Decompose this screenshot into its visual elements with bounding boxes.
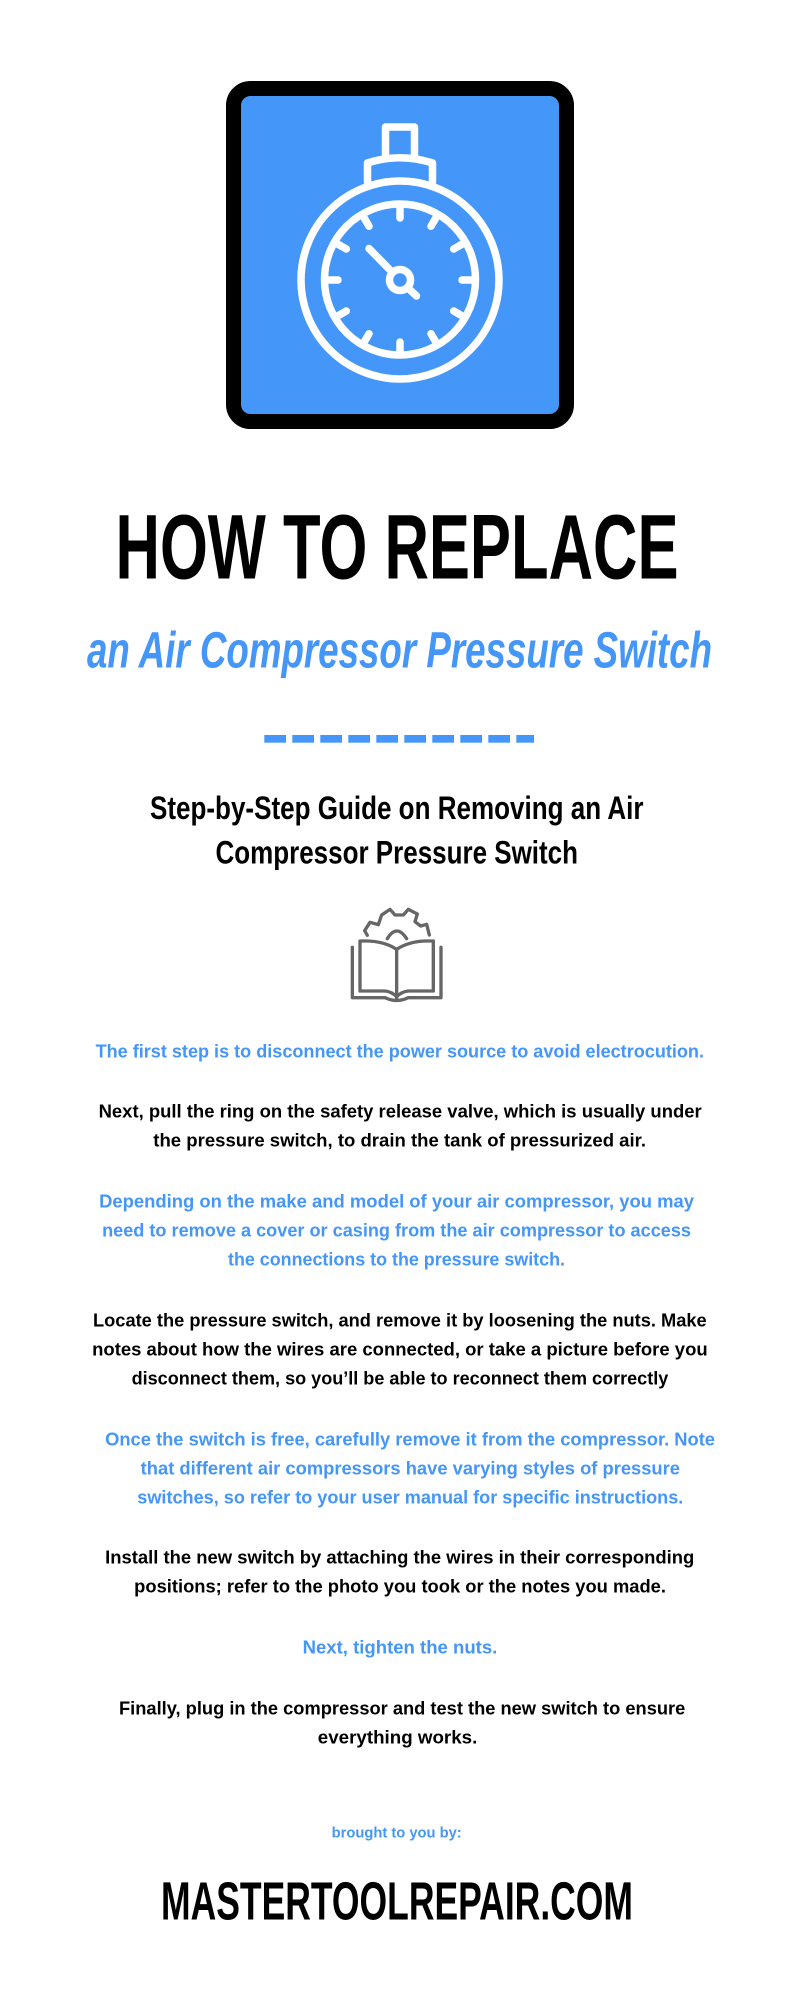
step 4: disconnect them, so you’ll be able to reconnect them correctly [132, 1369, 668, 1389]
step 1: The first step is to disconnect the power source to avoid electrocution. [96, 1041, 704, 1061]
step 2 [99, 1101, 702, 1150]
step 4 [92, 1311, 708, 1389]
step 4: notes about how the wires are connected, or take a picture before you [92, 1340, 708, 1360]
step 4: Locate the pressure switch, and remove it by loosening the nuts. Make [93, 1311, 707, 1331]
credit label: brought to you by: [332, 1825, 462, 1841]
step 3: the connections to the pressure switch. [228, 1250, 565, 1270]
dashed divider [264, 735, 534, 743]
section heading [150, 790, 644, 870]
icon: book with gear [352, 909, 441, 1000]
gauge drawing [301, 127, 499, 379]
step 8: Finally, plug in the compressor and test the new switch to ensure [119, 1698, 685, 1718]
step 7: Next, tighten the nuts. [303, 1637, 497, 1657]
step 6: Install the new switch by attaching the wires in their corresponding [105, 1547, 694, 1567]
step 8 [119, 1698, 685, 1747]
step 5: switches, so refer to your user manual for specific instructions. [137, 1487, 683, 1507]
badge frame [234, 88, 566, 422]
section heading: Compressor Pressure Switch [216, 834, 578, 870]
step 3: need to remove a cover or casing from the air compressor to access [102, 1221, 691, 1241]
step 3: Depending on the make and model of your air compressor, you may [99, 1192, 694, 1212]
step 6 [105, 1547, 694, 1596]
step 5 [105, 1430, 715, 1507]
step 8: everything works. [318, 1727, 477, 1747]
step 6: positions; refer to the photo you took or the notes you made. [134, 1576, 666, 1596]
step 5: Once the switch is free, carefully remove it from the compressor. Note [105, 1430, 715, 1450]
icon: pressure gauge badge [234, 88, 566, 422]
step 2: Next, pull the ring on the safety release valve, which is usually under [99, 1101, 702, 1121]
step 3 [99, 1192, 694, 1270]
step 2: the pressure switch, to drain the tank of pressurized air. [153, 1130, 646, 1150]
step 5: that different air compressors have varying styles of pressure [141, 1459, 680, 1479]
section heading: Step-by-Step Guide on Removing an Air [150, 790, 644, 826]
